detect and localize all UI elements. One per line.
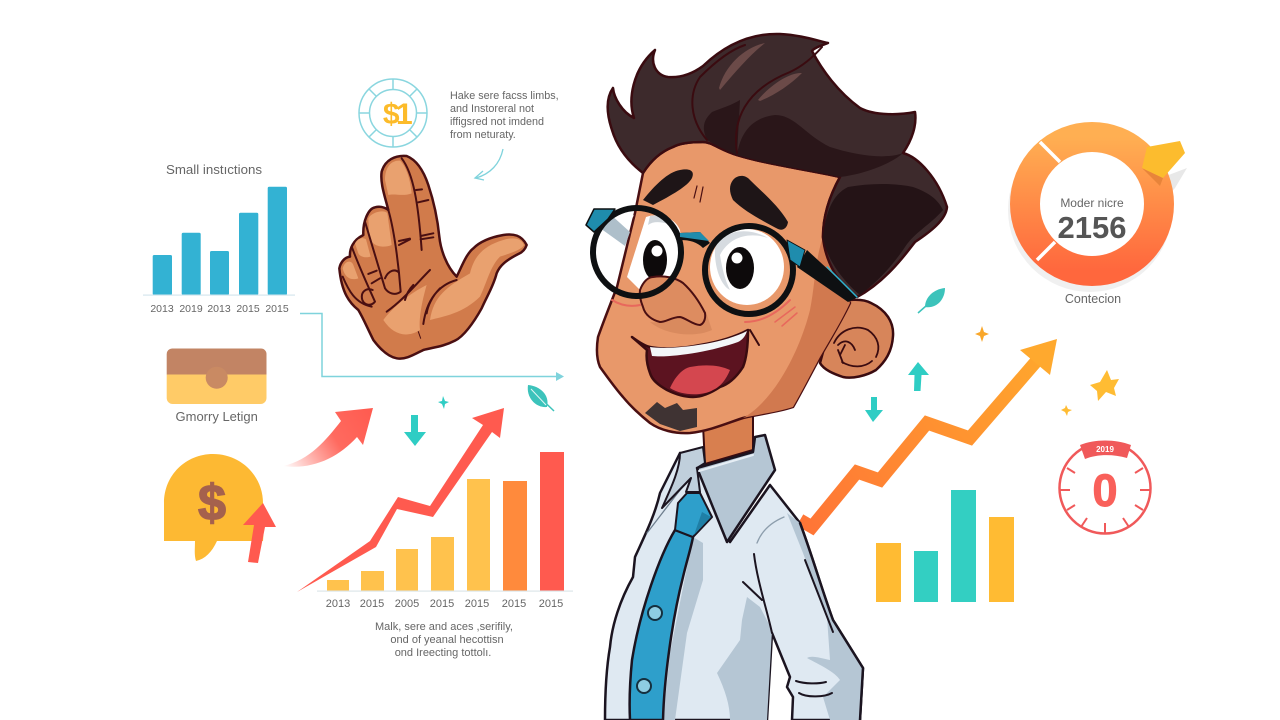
icon: gold star xyxy=(1090,370,1119,401)
icon: small star xyxy=(1061,405,1072,416)
text block: hand note: and Instoreral not xyxy=(450,103,534,115)
icon: coin badge xyxy=(359,79,427,147)
man tie xyxy=(630,493,712,720)
illustration: pointing hand xyxy=(339,156,527,359)
text block: hand note xyxy=(450,90,559,141)
man ear xyxy=(820,300,893,378)
icon: orange sparkle xyxy=(975,326,989,342)
bars: blue xyxy=(153,187,287,295)
man glasses xyxy=(586,208,858,314)
gauge flag xyxy=(1142,141,1185,186)
gauge caption: Contecion xyxy=(1065,292,1121,306)
year labels: central chart: 2005 xyxy=(395,598,419,610)
man shirt xyxy=(605,453,863,720)
icon: countdown dial xyxy=(1059,440,1151,534)
man right eye xyxy=(710,229,784,305)
illustration: cartoon man xyxy=(586,34,947,720)
bars: yellow to red xyxy=(327,452,564,590)
icon: coin badge: $1 xyxy=(383,98,412,131)
year labels: left chart: 2015 xyxy=(265,303,289,315)
year labels: central chart xyxy=(326,598,563,610)
man eyebrows xyxy=(643,169,788,230)
man face xyxy=(597,142,850,433)
icon: dollar speech bubble with arrow: $ xyxy=(198,475,226,531)
icon: teal down arrow xyxy=(404,415,426,446)
icon: teal sparkle xyxy=(438,396,449,409)
text block: hand note: iffigsred not imdend xyxy=(450,116,544,128)
man left eye and lens xyxy=(593,214,681,290)
icon: dollar speech bubble with arrow xyxy=(164,454,276,563)
man hair xyxy=(608,34,947,297)
text block: hand note: Hake sere facss limbs, xyxy=(450,90,559,102)
man cheek marks xyxy=(612,300,797,326)
year labels: central chart: 2015 xyxy=(430,598,454,610)
year labels: central chart: 2013 xyxy=(326,598,350,610)
icon: teal up arrow xyxy=(908,362,929,391)
year labels: central chart: 2015 xyxy=(360,598,384,610)
gauge ring xyxy=(1025,137,1159,271)
arrow: red rising line xyxy=(297,408,504,592)
icon: wallet xyxy=(167,348,266,404)
gauge value: 2156 xyxy=(1058,210,1126,245)
icon: teal leaf xyxy=(528,385,554,411)
caption: below central chart: ond of yeanal hecottisn xyxy=(390,634,504,646)
man mouth xyxy=(632,330,759,397)
caption: below central chart: ond Ireecting tottolı. xyxy=(395,647,491,659)
icon: countdown dial: 2019 xyxy=(1096,445,1114,454)
man collar xyxy=(662,435,775,542)
year labels: left chart: 2013 xyxy=(207,303,231,315)
illustration: orange rising arrow xyxy=(800,339,1057,527)
caption: below central chart: Malk, sere and aces ,serifily, xyxy=(375,621,513,633)
heading: small instructions: Small instıctions xyxy=(166,162,262,177)
year labels: central chart: 2015 xyxy=(539,598,563,610)
year labels: central chart: 2015 xyxy=(465,598,489,610)
man nose xyxy=(640,276,705,325)
panel: central column chart with rising arrow xyxy=(297,408,573,610)
year labels: left chart: 2019 xyxy=(179,303,203,315)
icon: teal leaf right xyxy=(918,288,945,313)
icon: countdown dial: 0 xyxy=(1092,465,1118,516)
year labels: left chart: 2013 xyxy=(150,303,174,315)
year labels: left chart: 2015 xyxy=(236,303,260,315)
arrow: red swoosh xyxy=(283,408,373,467)
icon: teal small down arrow xyxy=(865,397,883,422)
year labels: left chart xyxy=(150,303,289,315)
gauge label: Moder nicre xyxy=(1060,196,1124,210)
wallet label: Gmorry Letign xyxy=(176,409,258,424)
arrow: curved teal pointer xyxy=(475,149,503,180)
panel: right bar chart xyxy=(876,490,1014,602)
gauge shadow xyxy=(1008,128,1172,292)
text block: hand note: from neturaty. xyxy=(450,129,516,141)
man neck xyxy=(703,415,753,464)
caption: below central chart xyxy=(375,621,513,659)
year labels: central chart: 2015 xyxy=(502,598,526,610)
panel: small instructions bar chart xyxy=(143,162,295,315)
connector arrow xyxy=(300,314,564,381)
panel: donut gauge xyxy=(1008,128,1187,306)
man goatee xyxy=(645,402,697,431)
